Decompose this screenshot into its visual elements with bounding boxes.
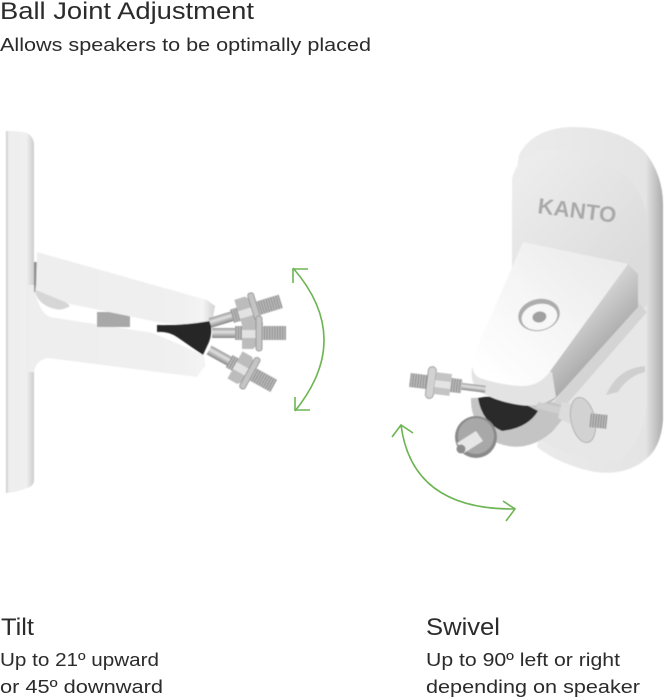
bolt: left <box>408 364 487 405</box>
plate face <box>512 150 647 390</box>
swivel caption: Up to 90º left or right <box>426 649 620 670</box>
ball joint <box>157 321 211 355</box>
wedge side <box>538 264 638 403</box>
socket hole <box>515 295 563 335</box>
gap block <box>97 312 130 327</box>
back plate <box>512 127 663 473</box>
tilt arrow <box>293 268 324 411</box>
lower plate <box>540 305 647 462</box>
tilt caption <box>0 614 163 697</box>
upper arm <box>36 252 215 325</box>
lower arm <box>28 285 205 377</box>
wedge rim <box>472 360 556 406</box>
swivel caption <box>426 614 640 697</box>
illustration: side view of the mount tilting <box>6 131 286 493</box>
brand logo: KANTO <box>536 193 618 228</box>
tilt caption: or 45º downward <box>0 676 163 697</box>
ball joint <box>478 397 538 431</box>
plate notch <box>606 366 645 395</box>
bolt: front <box>455 416 497 458</box>
bolt: right <box>536 395 608 445</box>
illustration: front view of the mount swivelling <box>408 127 663 473</box>
tilt caption: Up to 21º upward <box>0 649 159 670</box>
bolt: downward <box>200 335 282 402</box>
subheading: Allows speakers to be optimally placed <box>0 34 371 55</box>
tilt caption: Tilt <box>1 614 34 641</box>
arm hinge shadow <box>34 262 37 292</box>
wall plate <box>6 131 34 493</box>
arm shoulder <box>552 300 647 412</box>
bolt: upward <box>205 285 286 340</box>
swivel arrow <box>392 425 515 521</box>
swivel caption: Swivel <box>426 614 500 641</box>
wedge top <box>473 242 628 386</box>
swivel caption: depending on speaker <box>426 676 640 697</box>
upper arm underside <box>35 285 70 310</box>
cradle <box>471 396 572 447</box>
bolt: level <box>212 316 286 351</box>
